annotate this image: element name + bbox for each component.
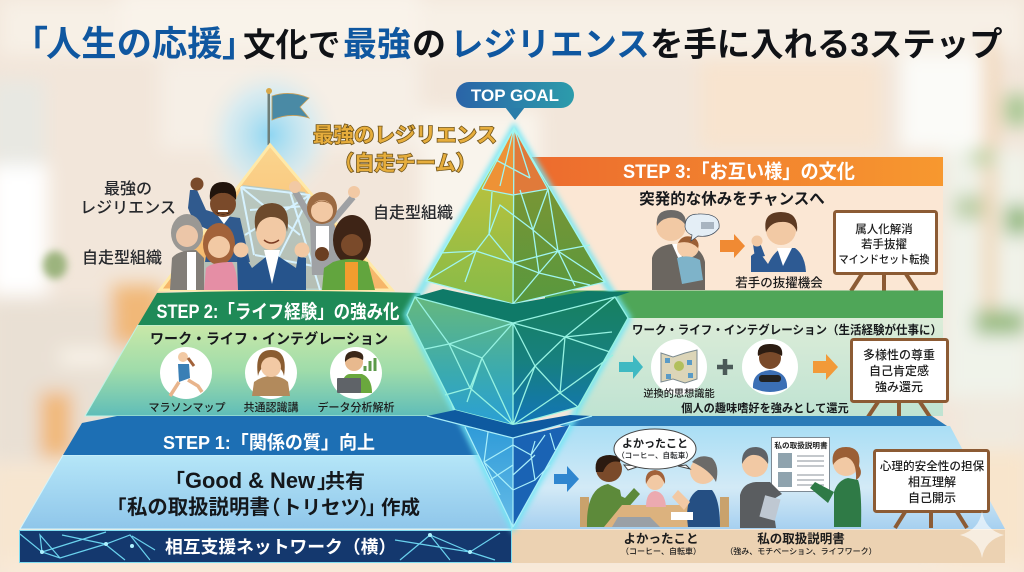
board: step 3 results (834, 212, 936, 291)
peak triangle (160, 145, 392, 290)
crystal lower section (427, 410, 592, 527)
icon: runner (160, 347, 212, 399)
tan base strip (512, 530, 1005, 563)
board: step 3 results: マインドセット転換 (838, 252, 930, 266)
title: 「 (13, 25, 48, 64)
board: step 1 results (874, 450, 988, 528)
network label: 相互支援ネットワーク（横） (165, 537, 396, 557)
step 2 right band (545, 290, 943, 318)
board: step 2 results: 自己肯定感 (869, 363, 929, 378)
step 2 body (85, 325, 455, 416)
arrow: orange (720, 234, 745, 258)
board: step 1 results: 相互理解 (908, 474, 956, 489)
left summit: flag, peak and team (160, 60, 392, 290)
step 2 subheading: ワーク・ライフ・インテグレーション (150, 330, 388, 348)
icon: woman (245, 347, 297, 399)
caption: good things: よかったこと (623, 532, 699, 546)
captions: step 2 examples: マラソンマップ (148, 401, 226, 414)
title: 」 (222, 26, 255, 63)
board: step 3 results: 若手抜擢 (861, 237, 907, 251)
person: woman in green (315, 215, 375, 290)
step 1 band (63, 416, 490, 455)
arrow: orange (813, 354, 838, 380)
step 1 body (20, 455, 512, 529)
sky glow (198, 60, 342, 210)
step 1 text: 」 (366, 497, 386, 519)
left labels (80, 180, 453, 267)
step 3 heading band (520, 157, 943, 186)
illustration: young employee (751, 212, 806, 272)
title: を手に入れる3ステップ (650, 27, 1002, 64)
step 1 text: ） (359, 497, 379, 519)
panel: STEP 1 right (512, 416, 1005, 563)
step 2 right body (575, 318, 943, 416)
illustration: meeting (580, 455, 729, 527)
step 1 text: （ (261, 497, 281, 519)
step 1 right top band (560, 416, 947, 426)
speech bubble: good things (614, 429, 696, 470)
icon: gamer circle (742, 339, 798, 395)
plus sign (717, 359, 733, 375)
captions: step 2 examples: 共通認識講 (244, 400, 298, 414)
captions: step 2 examples (148, 400, 394, 414)
step 1 text: 「 (165, 470, 185, 493)
panel: mutual support network (20, 530, 512, 562)
illustration: manual presentation: 私の取扱説明書 (774, 440, 828, 450)
board: step 1 results: 心理的安全性の担保 (880, 459, 985, 473)
person: woman arms raised (289, 181, 360, 275)
illustration: manager holding baby (652, 210, 719, 290)
step 1 text: 」 (317, 471, 337, 493)
title: 最強 (343, 26, 411, 64)
TOP GOAL badge: TOP GOAL (471, 86, 559, 105)
gold heading: strongest resilience: （自走チーム） (334, 152, 476, 175)
title: レジリエンス (450, 27, 650, 64)
title: 文化で (243, 27, 341, 63)
board: step 2 results: 多様性の尊重 (863, 347, 935, 362)
crystal middle section (407, 289, 630, 425)
icon: data analyst (330, 347, 382, 399)
caption: manual: （強み、モチベーション、ライフワーク） (725, 546, 877, 556)
caption: hobby strengths: 個人の趣味嗜好を強みとして還元 (681, 401, 849, 415)
panel: STEP 1 left pyramid (20, 416, 512, 529)
person: woman in pink (203, 223, 238, 290)
board: step 2 results: 強み還元 (875, 380, 923, 394)
central crystal pyramid (407, 128, 630, 527)
step 1 heading: STEP 1:「関係の質」向上 (163, 432, 375, 453)
board: step 1 results: 自己開示 (908, 491, 956, 505)
person: dark man (188, 178, 250, 262)
step 1 text: 共有 (325, 470, 365, 493)
arrow: blue (554, 466, 579, 492)
step 3 subheading: 突発的な休みをチャンスへ (639, 190, 825, 208)
title (13, 25, 1002, 64)
board: step 3 results: 属人化解消 (855, 222, 913, 236)
board: step 2 results (852, 340, 948, 417)
step 3 heading: STEP 3:「お互い様」の文化 (623, 161, 855, 183)
crystal glow (407, 128, 628, 527)
network pattern (20, 532, 500, 560)
caption: good things (621, 532, 701, 556)
caption: manual (725, 531, 877, 556)
step 1 text: 作成 (381, 496, 420, 519)
caption: young promotion: 若手の抜擢機会 (735, 275, 823, 290)
TOP GOAL badge (456, 82, 574, 120)
speech bubble: good things: よかったこと (622, 437, 688, 450)
panel: STEP 2 left pyramid (85, 291, 455, 416)
icon: map circle (651, 339, 707, 395)
gold heading: strongest resilience (313, 124, 497, 175)
person: central man (234, 203, 310, 290)
step 1 text: 私の取扱説明書 (127, 496, 270, 519)
gold heading: strongest resilience: 最強のレジリエンス (313, 124, 497, 147)
step 1 text (107, 468, 420, 519)
title: 人生の応援 (46, 25, 222, 64)
caption: manual: 私の取扱説明書 (757, 531, 845, 546)
left labels: 最強の (104, 180, 152, 198)
caption: reverse-thinking skill: 逆換的思想識能 (643, 387, 715, 400)
network inside peak (190, 185, 350, 290)
step 2 right heading: ワーク・ライフ・インテグレーション（生活経験が仕事に） (632, 323, 942, 337)
panel: STEP 2 right (545, 290, 948, 417)
panel: STEP 3 right (520, 157, 943, 291)
caption: good things: （コーヒー、自転車） (621, 546, 701, 556)
left labels: レジリエンス (80, 200, 176, 217)
title: の (412, 26, 446, 64)
illustration: manual presentation (740, 438, 861, 528)
step 1 text: トリセツ (282, 497, 360, 519)
icon: flag (266, 88, 309, 145)
step 2 band (138, 291, 430, 325)
arrow: teal (619, 355, 643, 379)
left labels: 自走型組織 (373, 204, 453, 222)
sparkle (960, 511, 1004, 558)
captions: step 2 examples: データ分析解析 (318, 400, 394, 414)
crystal top section (426, 128, 605, 304)
step 1 text: Good & New (185, 468, 316, 493)
step 3 body (520, 186, 943, 290)
step 1 text: 「 (107, 497, 127, 519)
left labels: 自走型組織 (82, 249, 162, 267)
speech bubble: good things: （コーヒー、自転車） (617, 450, 693, 460)
step 1 right body (512, 426, 1005, 529)
person: grey-haired woman (170, 214, 204, 290)
step 2 heading: STEP 2:「ライフ経験」の強み化 (156, 301, 400, 323)
